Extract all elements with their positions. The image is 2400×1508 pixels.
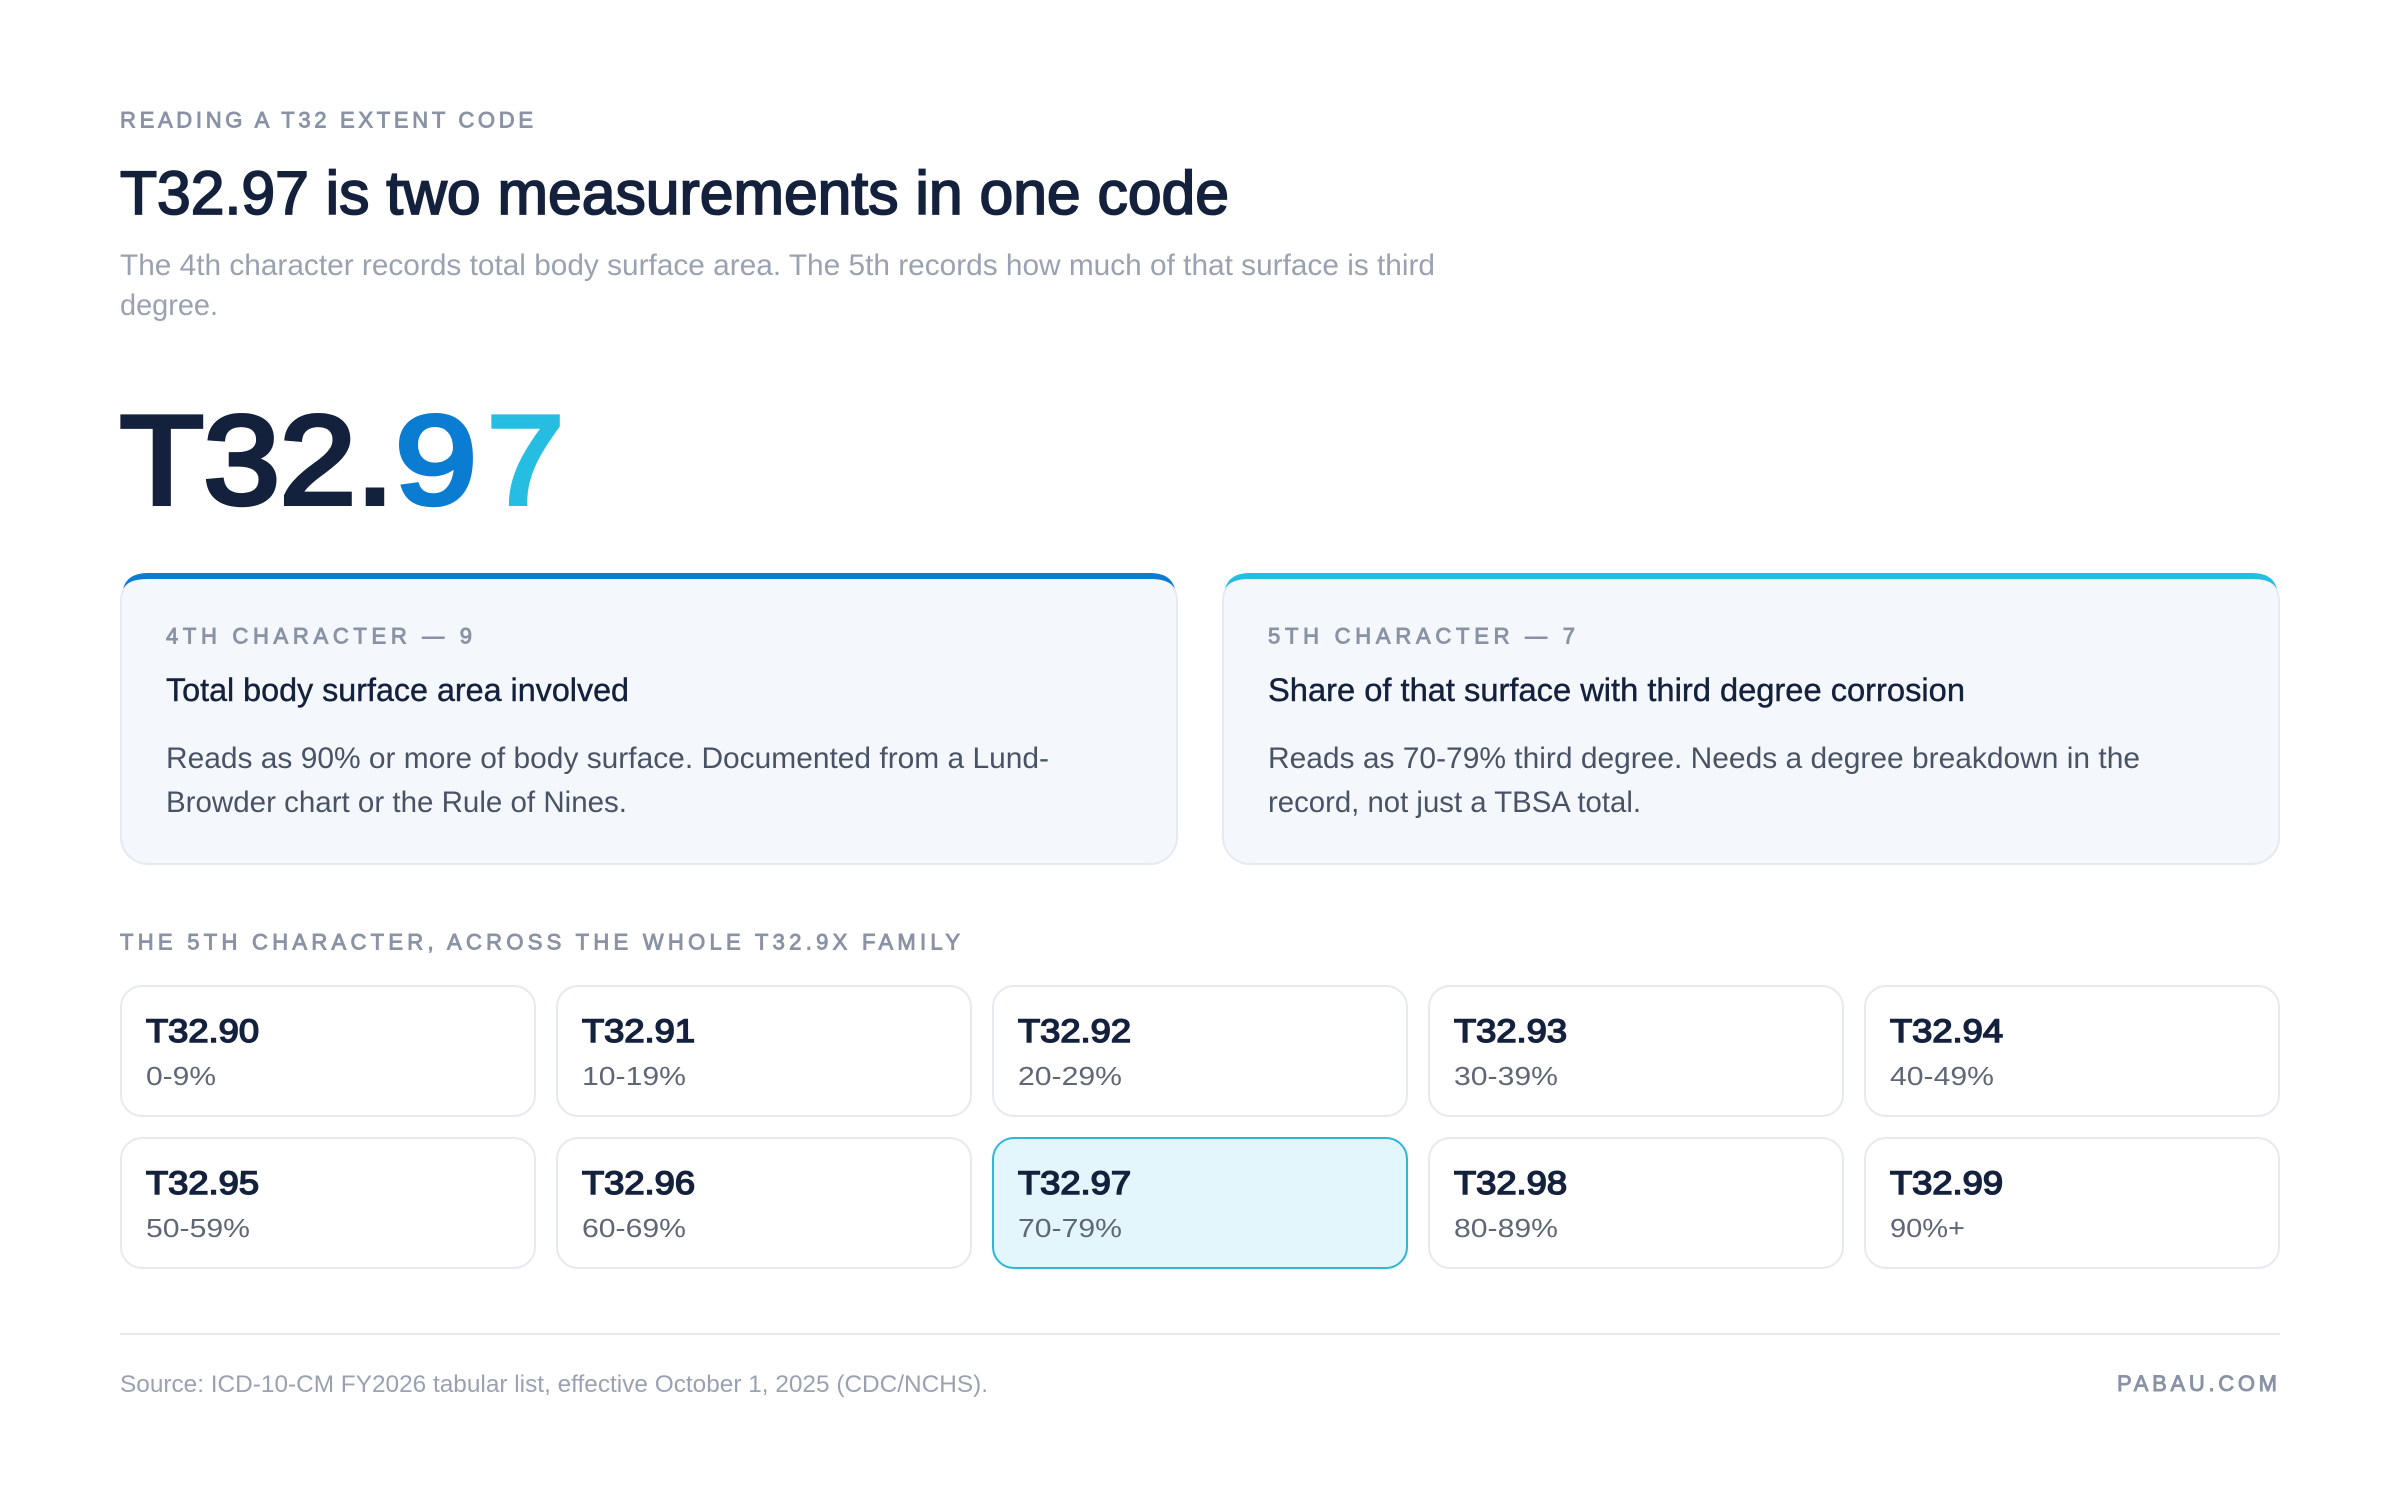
- card: T32.97 highlighted: T32.97: [1018, 1165, 1131, 1201]
- card: T32.93: [1429, 986, 1843, 1116]
- card: T32.95: 50-59%: [146, 1213, 250, 1243]
- card: T32.99: T32.99: [1890, 1165, 2003, 1201]
- card: T32.99: 90%+: [1890, 1213, 1965, 1243]
- panel: 4th character: 4TH CHARACTER — 9: [166, 624, 472, 648]
- card: T32.90: 0-9%: [146, 1061, 216, 1091]
- card: T32.98: T32.98: [1454, 1165, 1567, 1201]
- panel: 4th character: Reads as 90% or more of body surface. Documented from a Lund-: [166, 742, 1049, 775]
- card: T32.93: T32.93: [1454, 1013, 1567, 1049]
- source note: Source: ICD-10-CM FY2026 tabular list, effective October 1, 2025 (CDC/NCHS).: [120, 1371, 988, 1398]
- card: T32.98: 80-89%: [1454, 1213, 1558, 1243]
- subtitle: degree.: [120, 289, 218, 322]
- card: T32.93: 30-39%: [1454, 1061, 1558, 1091]
- panel: 5th character: Reads as 70-79% third degree. Needs a degree breakdown in the: [1268, 742, 2140, 775]
- subtitle: The 4th character records total body surface area. The 5th records how much of that surface is third: [120, 249, 1435, 282]
- panel: 5th character: [1223, 573, 2279, 864]
- panel: 5th character: 5TH CHARACTER — 7: [1268, 624, 1575, 648]
- card: T32.90: [121, 986, 535, 1116]
- panel: 5th character: Share of that surface with third degree corrosion: [1268, 672, 1965, 708]
- card: T32.97 highlighted: 70-79%: [1018, 1213, 1122, 1243]
- card: T32.91: T32.91: [582, 1013, 695, 1049]
- card: T32.91: 10-19%: [582, 1061, 686, 1091]
- card: T32.97 highlighted: [993, 1138, 1407, 1268]
- card: T32.94: 40-49%: [1890, 1061, 1994, 1091]
- card: T32.92: T32.92: [1018, 1013, 1131, 1049]
- card: T32.94: T32.94: [1890, 1013, 2003, 1049]
- eyebrow label: READING A T32 EXTENT CODE: [120, 108, 533, 132]
- card: T32.95: T32.95: [146, 1165, 259, 1201]
- card: T32.96: [557, 1138, 971, 1268]
- card: T32.91: [557, 986, 971, 1116]
- panel: 5th character: record, not just a TBSA total.: [1268, 786, 1641, 819]
- large code display: [120, 390, 564, 530]
- code grid: [121, 986, 2279, 1268]
- card: T32.90: T32.90: [146, 1013, 259, 1049]
- large code display: 7: [487, 390, 564, 530]
- large code display: T32.: [120, 390, 394, 530]
- panel: 4th character: [121, 573, 1177, 864]
- card: T32.98: [1429, 1138, 1843, 1268]
- subtitle: [120, 249, 1435, 322]
- card: T32.96: 60-69%: [582, 1213, 686, 1243]
- card: T32.92: [993, 986, 1407, 1116]
- large code display: 9: [395, 390, 477, 530]
- panel: 4th character: Total body surface area involved: [166, 672, 629, 708]
- title: T32.97 is two measurements in one code: [120, 159, 1229, 227]
- brand: PABAU.COM: [2117, 1371, 2277, 1396]
- card: T32.95: [121, 1138, 535, 1268]
- card: T32.94: [1865, 986, 2279, 1116]
- card: T32.99: [1865, 1138, 2279, 1268]
- card: T32.96: T32.96: [582, 1165, 695, 1201]
- section heading: THE 5TH CHARACTER, ACROSS THE WHOLE T32.9X FAMILY: [120, 930, 960, 954]
- card: T32.92: 20-29%: [1018, 1061, 1122, 1091]
- panel: 4th character: Browder chart or the Rule of Nines.: [166, 786, 627, 819]
